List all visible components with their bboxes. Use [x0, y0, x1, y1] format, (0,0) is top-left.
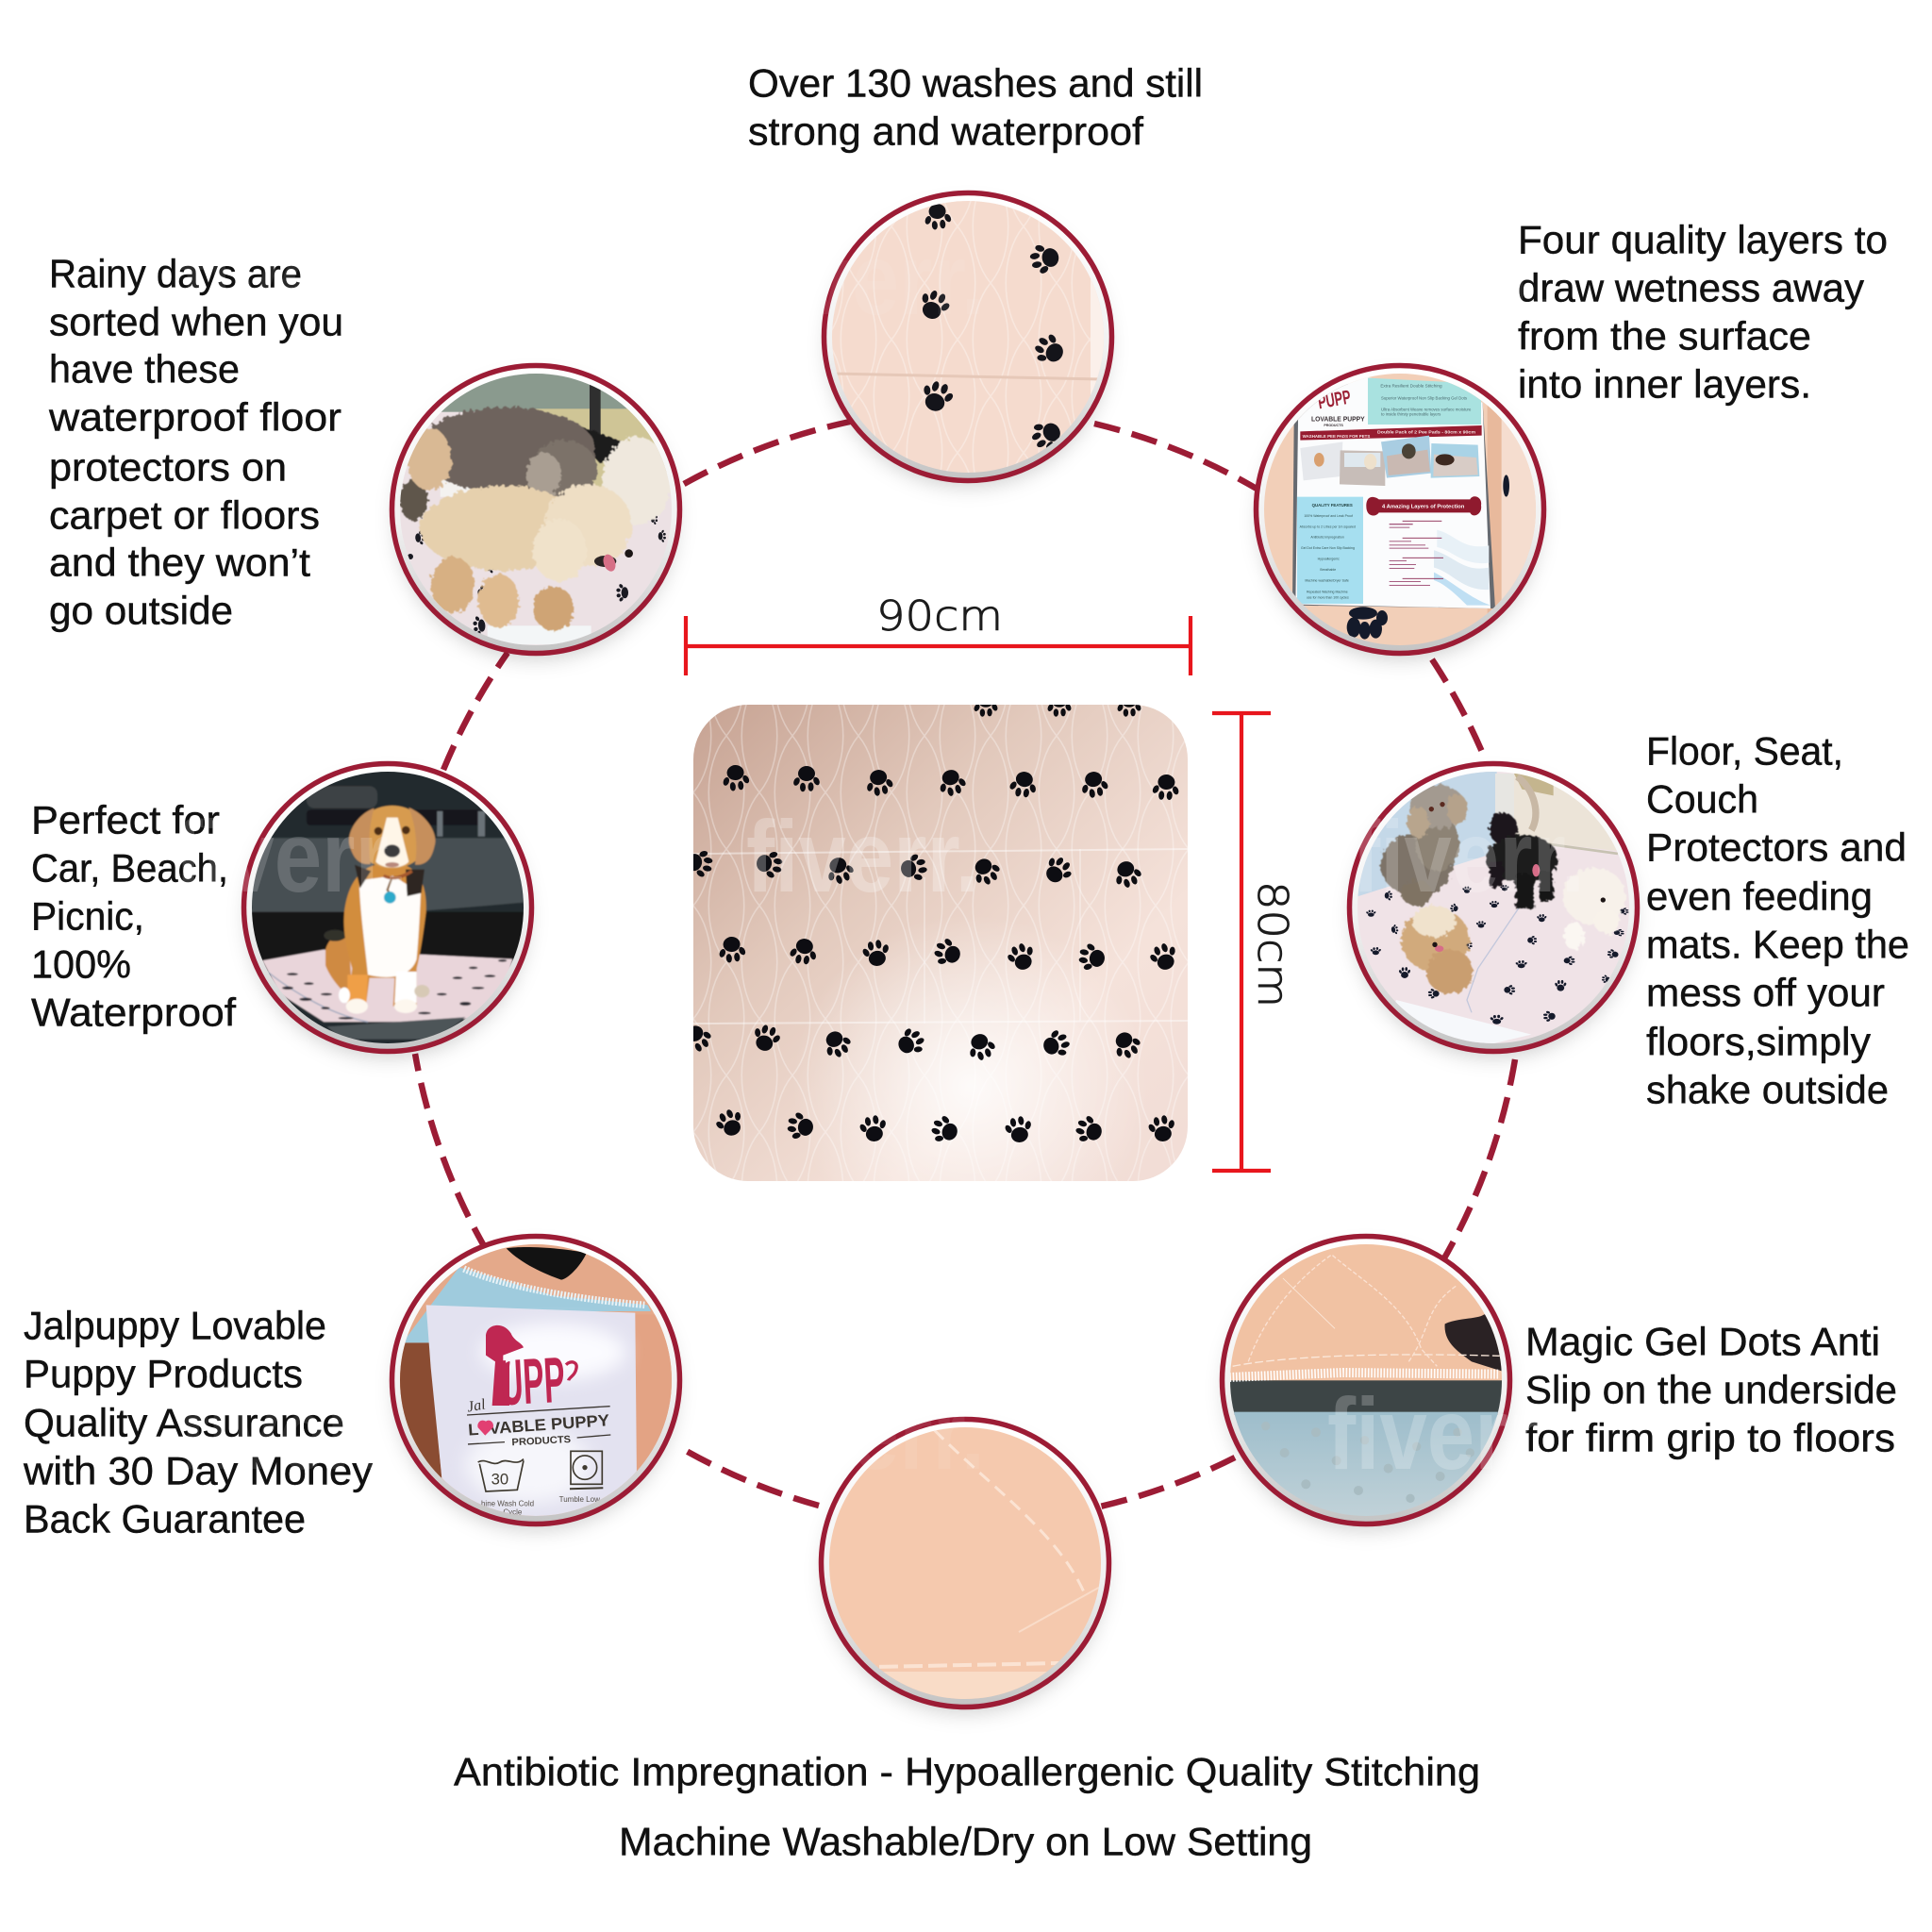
text: antibiotic impregnation and machine washable	[454, 1749, 1480, 1864]
circle photo: bottom left, care label: PRODUCTS	[511, 1434, 571, 1448]
circle photo: top right, product leaflet: use for more than 100 cycles	[1307, 595, 1349, 599]
circle photo: bottom left, care label: 30	[491, 1470, 508, 1488]
text: rainy days	[48, 251, 343, 632]
circle photo: top right, product leaflet: Extra Resilient Double Stitching	[1380, 384, 1442, 389]
text: perfect for car: Perfect for	[31, 798, 220, 841]
text: floor seat couch protectors: Protectors and	[1646, 824, 1907, 870]
circle photo: bottom left, care label: UPP	[498, 1344, 567, 1419]
text: rainy days: waterproof floor	[48, 394, 341, 440]
circle photo: top left, poodles on pad	[387, 362, 685, 668]
circle photo: top, pad close-up with paws	[824, 192, 1113, 486]
text: rainy days: protectors on	[49, 445, 287, 489]
text: floor seat couch protectors	[1646, 728, 1909, 1111]
circle photo: top right, product leaflet: to inside thirsty penetrable layers	[1381, 412, 1441, 417]
text: magic gel dots: Slip on the underside	[1525, 1368, 1897, 1411]
text: magic gel dots: for firm grip to floors	[1525, 1415, 1895, 1460]
circle photo: bottom left, care label: Cycle	[503, 1507, 523, 1516]
text: perfect for car	[31, 798, 236, 1034]
text: floor seat couch protectors: Floor, Seat,	[1646, 728, 1843, 774]
text: perfect for car: 100%	[31, 941, 131, 987]
circle photo: bottom left, care label	[387, 1234, 685, 1539]
circle photo: top right, product leaflet: PUPP	[1316, 386, 1353, 413]
circle photo: top right, product leaflet: 4 Amazing Layers of Protection	[1382, 504, 1465, 509]
watermark: fiverr.	[1327, 1376, 1560, 1491]
circle photo: bottom left, care label: L♥VABLE PUPPY	[468, 1410, 610, 1440]
text: quality assurance: Jalpuppy Lovable	[24, 1304, 326, 1347]
circle photo: bottom left, care label: Tumble Low	[559, 1495, 600, 1504]
text: antibiotic impregnation and machine washable: Antibiotic Impregnation - Hypoallergenic Quality Stitching	[454, 1749, 1480, 1794]
text: rainy days: and they won’t	[49, 540, 310, 585]
circle photo: top right, product leaflet: Ultra Absorbent Weave removes surface moisture	[1381, 407, 1472, 411]
watermark: fiverr.	[752, 1376, 985, 1491]
watermark: fiverr.	[746, 799, 979, 913]
circle photo: bottom, peach fabric close-up	[821, 1415, 1113, 1717]
text: quality assurance: with 30 Day Money	[23, 1449, 373, 1492]
text: floor seat couch protectors: mats. Keep the	[1646, 923, 1909, 966]
text: floor seat couch protectors: floors,simply	[1646, 1019, 1871, 1064]
circle photo: top right, product leaflet: Antibiotic Impregnation	[1310, 536, 1344, 540]
dimension: width 90cm	[686, 592, 1191, 675]
watermark	[175, 222, 1585, 1491]
circle photo: top right, product leaflet: Machine washable/Dryer Safe	[1305, 578, 1349, 582]
dimension: height 80cm	[1212, 713, 1296, 1171]
text: floor seat couch protectors: even feeding	[1646, 874, 1873, 919]
text: four quality layers: Four quality layers to	[1518, 217, 1888, 262]
circle photo: top right, product leaflet: Double Pack of 2 Pee Pads - 80cm x 90cm	[1377, 429, 1475, 434]
text: perfect for car: Picnic,	[31, 894, 144, 938]
text: over 130 washes: strong and waterproof	[748, 109, 1143, 153]
text: quality assurance: Quality Assurance	[24, 1400, 344, 1445]
circle photo: top right, product leaflet: Hypoallergenic	[1318, 557, 1340, 560]
watermark: fiverr.	[1352, 799, 1585, 913]
text: floor seat couch protectors: shake outside	[1646, 1068, 1889, 1111]
circle photo: top right, product leaflet: Superior Waterproof Non Slip Backing Gel Dots	[1381, 395, 1467, 400]
text: perfect for car: Waterproof	[31, 991, 236, 1034]
watermark: fiverr.	[1324, 222, 1557, 336]
circle photo: top right, product leaflet: LOVABLE PUPPY	[1311, 417, 1365, 424]
circle photo: right, four poodles on pads	[1344, 760, 1642, 1066]
watermark: fiverr.	[175, 799, 408, 913]
text: four quality layers: draw wetness away	[1518, 266, 1864, 309]
circle photo: top right, product leaflet: QUALITY FEATURES	[1312, 503, 1353, 508]
text: rainy days: carpet or floors	[49, 492, 320, 538]
text: magic gel dots: Magic Gel Dots Anti	[1525, 1319, 1880, 1364]
text: rainy days: go outside	[49, 589, 233, 632]
dashed connecting ring	[415, 422, 1515, 1507]
watermark: fiverr.	[179, 1376, 412, 1491]
circle photo: bottom right, anti-slip underside	[1217, 1234, 1515, 1539]
circle photo: bottom left, care label: Jal	[466, 1396, 487, 1416]
circle photo: top right, product leaflet: Repeated Washing Machine	[1307, 591, 1348, 594]
text: rainy days: have these	[49, 347, 240, 391]
circle photo: top right, product leaflet: Breathable	[1320, 568, 1336, 572]
text: four quality layers	[1518, 217, 1888, 406]
circle photo: top right, product leaflet: Absorbs up to 2 Litres per 1m squared	[1300, 525, 1356, 528]
circle photo: left, beagle in car boot	[239, 760, 537, 1066]
text: perfect for car: Car, Beach,	[31, 845, 228, 891]
text: antibiotic impregnation and machine washable: Machine Washable/Dry on Low Setting	[619, 1819, 1312, 1864]
text: quality assurance: Back Guarantee	[24, 1496, 306, 1541]
watermark: fiverr.	[752, 222, 985, 336]
circle photo: top right, product leaflet: 100% Waterproof and Leak Proof	[1304, 514, 1353, 518]
circle photo: top right, product leaflet: Gel Dot Extra Care Non Slip Backing	[1301, 546, 1355, 550]
text: floor seat couch protectors: Couch	[1646, 777, 1758, 821]
dimension: height 80cm: 80cm	[1248, 881, 1296, 1008]
circle photo: top right, product leaflet: WASHABLE PEE PADS FOR PETS	[1303, 434, 1370, 439]
text: rainy days: sorted when you	[49, 300, 343, 343]
circle photo: top right, product leaflet	[1251, 362, 1549, 668]
text: over 130 washes: Over 130 washes and still	[748, 60, 1203, 106]
central product pad with paw prints	[678, 693, 1188, 1181]
text: magic gel dots	[1525, 1319, 1897, 1460]
circle photo: top right, product leaflet: PRODUCTS	[1324, 424, 1343, 427]
text: rainy days: Rainy days are	[49, 251, 302, 296]
watermark: fiverr.	[179, 222, 412, 336]
text: over 130 washes	[748, 60, 1203, 153]
text: quality assurance: Puppy Products	[24, 1351, 303, 1396]
text: quality assurance	[23, 1304, 373, 1541]
text: four quality layers: from the surface	[1518, 313, 1811, 358]
circle photo: bottom left, care label: hine Wash Cold	[481, 1500, 534, 1508]
dimension: width 90cm: 90cm	[876, 592, 1003, 641]
text: floor seat couch protectors: mess off your	[1646, 970, 1885, 1015]
text: four quality layers: into inner layers.	[1518, 362, 1811, 406]
